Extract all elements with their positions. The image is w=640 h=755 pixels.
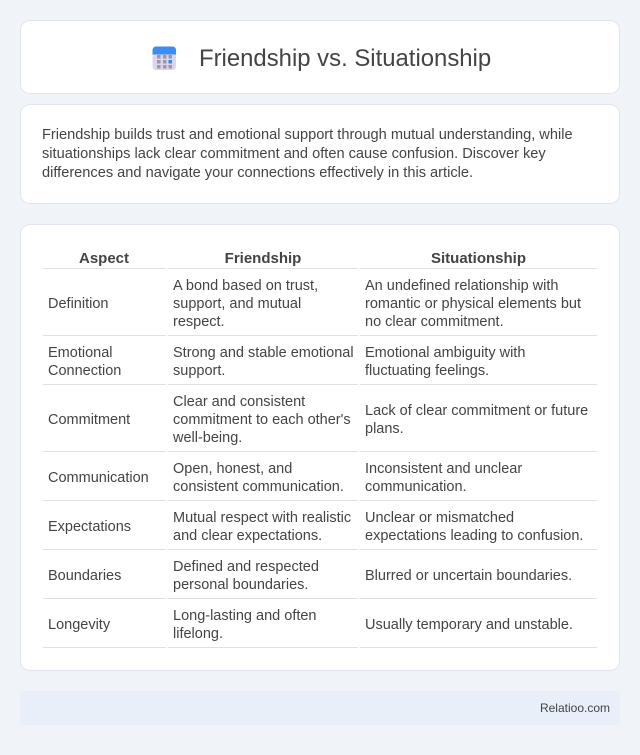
table: Definition [48, 296, 108, 312]
header: Aspect: Aspect [79, 250, 129, 267]
table: Communication [48, 470, 149, 486]
table: commitment to each other's [173, 412, 351, 428]
table: expectations leading to confusion. [365, 528, 583, 544]
table: communication. [365, 479, 467, 495]
table: A bond based on trust, [173, 278, 318, 294]
table: Lack of clear commitment or future [365, 403, 588, 419]
table: plans. [365, 421, 404, 437]
table: Longevity [48, 617, 110, 633]
table: consistent communication. [173, 479, 344, 495]
table: respect. [173, 314, 225, 330]
table: Commitment [48, 412, 130, 428]
table: Strong and stable emotional [173, 345, 354, 361]
table: lifelong. [173, 626, 223, 642]
icon: calendar [152, 46, 176, 70]
table: Defined and respected [173, 559, 319, 575]
row: Definition [48, 278, 581, 330]
table: Long-lasting and often [173, 608, 316, 624]
intro panel [20, 104, 620, 204]
table: support. [173, 363, 225, 379]
row: Longevity [48, 608, 573, 642]
table: personal boundaries. [173, 577, 308, 593]
footer bar [20, 691, 620, 725]
table: support, and mutual [173, 296, 301, 312]
table: Emotional [48, 345, 112, 361]
table: Unclear or mismatched [365, 510, 514, 526]
comparison table panel [20, 224, 620, 671]
row: Commitment [48, 394, 588, 446]
table: Boundaries [48, 568, 121, 584]
row: Emotional Connection [48, 345, 525, 379]
table: Open, honest, and [173, 461, 292, 477]
table: romantic or physical elements but [365, 296, 581, 312]
header: Friendship: Friendship [225, 250, 301, 267]
table: Inconsistent and unclear [365, 461, 522, 477]
row: Boundaries [48, 559, 572, 593]
header: Situationship: Situationship [431, 250, 526, 267]
table: Mutual respect with realistic [173, 510, 351, 526]
header panel [20, 20, 620, 94]
row: Communication [48, 461, 522, 495]
title: Friendship vs. Situationship [199, 45, 491, 72]
table: well-being. [173, 430, 242, 446]
footer credit: Relatioo.com [540, 701, 610, 715]
row: Expectations [48, 510, 583, 544]
table: fluctuating feelings. [365, 363, 489, 379]
intro text: Friendship builds trust and emotional support through mutual understanding, while [42, 127, 573, 143]
table: Expectations [48, 519, 131, 535]
table: Clear and consistent [173, 394, 305, 410]
table: Usually temporary and unstable. [365, 617, 573, 633]
intro text: differences and navigate your connections effectively in this article. [42, 165, 473, 181]
intro text [42, 127, 573, 181]
table: An undefined relationship with [365, 278, 558, 294]
intro text: situationships lack clear commitment and often cause confusion. Discover key [42, 146, 546, 162]
table: Connection [48, 363, 121, 379]
table: no clear commitment. [365, 314, 504, 330]
table: Emotional ambiguity with [365, 345, 525, 361]
table: and clear expectations. [173, 528, 322, 544]
table: Blurred or uncertain boundaries. [365, 568, 572, 584]
